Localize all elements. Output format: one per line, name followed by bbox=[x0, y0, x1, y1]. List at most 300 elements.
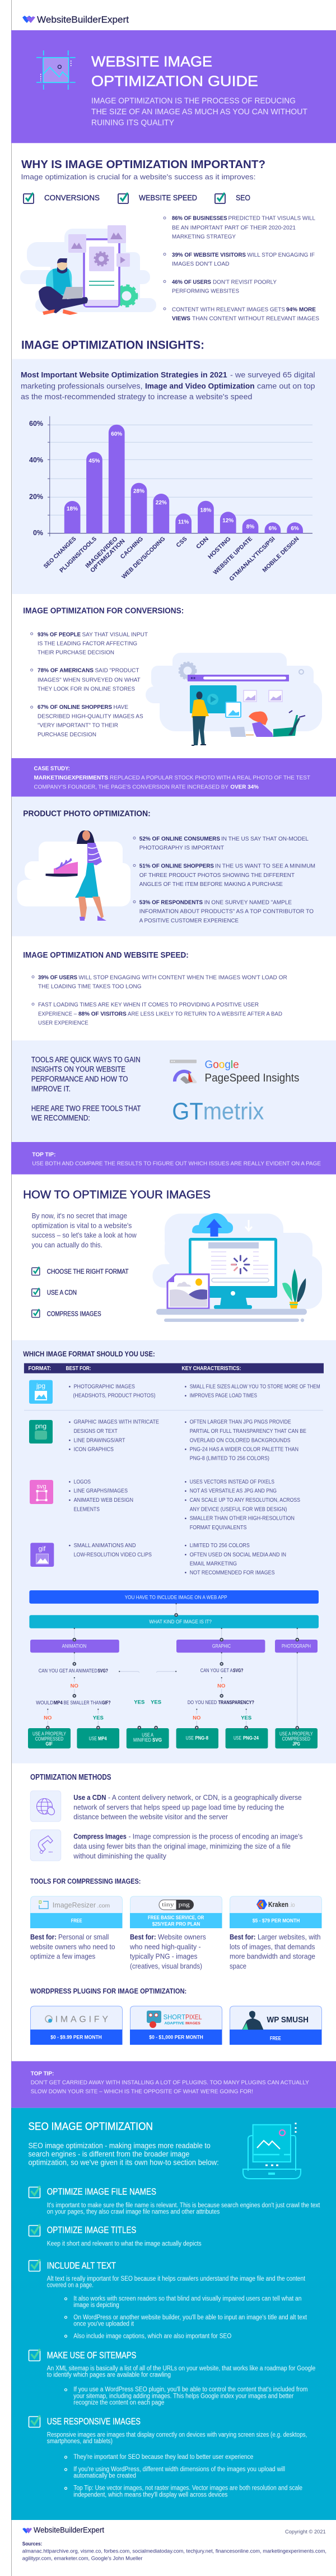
logo: .com bbox=[97, 1902, 110, 1909]
row: jpg bbox=[29, 1380, 320, 1404]
card: tinypng: who need high-quality - bbox=[129, 1942, 201, 1951]
row: png: PARTIAL OR FULL TRANSPARENCY THAT CAN BE bbox=[190, 1428, 306, 1435]
flowchart: choosing an image format: MP4 bbox=[98, 1735, 107, 1742]
bullet list: product photos: PHOTOGRAPHY IS IMPORTANT bbox=[139, 844, 225, 851]
row: svg: LOGOS bbox=[74, 1478, 91, 1485]
title bbox=[91, 53, 258, 89]
intro: optimization, so we've given it its own how-to section below: bbox=[28, 2158, 219, 2166]
logo bbox=[256, 1900, 295, 1909]
intro: search engines - is different from the broader image bbox=[28, 2150, 189, 2158]
heading: optimization methods: OPTIMIZATION METHODS bbox=[30, 1773, 111, 1782]
logo: ADAPTIVE bbox=[165, 2021, 185, 2025]
checklist: how to bbox=[32, 1267, 129, 1317]
bullet list: speed bbox=[32, 974, 287, 1027]
row: svg: USES VECTORS INSTEAD OF PIXELS bbox=[190, 1478, 274, 1485]
flowchart: choosing an image format: NO bbox=[71, 1683, 78, 1690]
row: svg: FORMAT EQUIVALENTS bbox=[190, 1524, 246, 1531]
bullet list: conversions: SAY THAT VISUAL INPUT bbox=[82, 631, 148, 638]
card: kraken: Best for: bbox=[230, 1933, 255, 1941]
subtitle: THE SIZE OF AN IMAGE AS MUCH AS YOU CAN WITHOUT bbox=[91, 107, 307, 117]
card: imageresizer: FREE bbox=[71, 1918, 82, 1924]
card: shortpixel: $0 - $1,000 PER MONTH bbox=[149, 2035, 203, 2041]
item: use responsive images: They're important for SEO because they lead to better user experience bbox=[73, 2454, 253, 2461]
bullet list: why stats: PREDICTED THAT VISUALS WILL bbox=[228, 215, 315, 222]
flowchart: choosing an image format: CAN YOU GET A bbox=[200, 1668, 233, 1674]
flowchart: choosing an image format: YES bbox=[134, 1700, 144, 1706]
flowchart: choosing an image format: DO YOU NEED bbox=[188, 1700, 217, 1706]
heading: wordpress plugins: WORDPRESS PLUGINS FOR IMAGE OPTIMIZATION: bbox=[30, 1987, 186, 1995]
item: optimize image file names: on your pages, they also crawl image file names and other attributes bbox=[47, 2209, 220, 2216]
panel: hero banner bbox=[11, 30, 336, 143]
card: kraken bbox=[230, 1896, 321, 1970]
heading: SEO IMAGE OPTIMIZATION bbox=[28, 2121, 153, 2133]
table header bbox=[24, 1363, 324, 1373]
intro text bbox=[32, 1212, 137, 1249]
flowchart: choosing an image format: NO bbox=[193, 1715, 200, 1721]
bar chart: optimization strategies: SEO CHANGES bbox=[43, 536, 78, 570]
flowchart: choosing an image format: PHOTOGRAPH bbox=[282, 1643, 311, 1649]
method: compress images: data using fewer bits than the original image, minimizing the size of a file bbox=[73, 1842, 291, 1850]
row: gif: LOW-RESOLUTION VIDEO CLIPS bbox=[74, 1551, 152, 1558]
bullet list: speed: FAST LOADING TIMES ARE KEY WHEN IT COMES TO PROVIDING A POSITIVE USER bbox=[38, 1001, 259, 1008]
row: gif: LIMITED TO 256 COLORS bbox=[190, 1542, 250, 1549]
bullet list: conversions: SAID "PRODUCT bbox=[95, 667, 139, 674]
bullet list: speed: 39% OF USERS bbox=[38, 974, 77, 981]
bar chart: optimization strategies: 6% bbox=[291, 526, 299, 532]
method: compress images: - Image compression is the process of encoding an image's bbox=[129, 1832, 303, 1841]
row: svg: ANIMATED WEB DESIGN bbox=[74, 1497, 133, 1503]
panel: case study: COMPANY'S FOUNDER, THE PAGE'S CONVERSION RATE INCREASED BY bbox=[34, 783, 228, 790]
bullet list: conversions: THEY LOOK FOR IN ONLINE STORES bbox=[38, 686, 135, 693]
item: optimize image titles: OPTIMIZE IMAGE TITLES bbox=[47, 2225, 136, 2235]
item: use responsive images: If you're using WordPress, different width dimensions of the images you upload will bbox=[73, 2466, 285, 2473]
flowchart: choosing an image format: SVG? bbox=[233, 1668, 244, 1674]
flowchart: choosing an image format: YOU HAVE TO INCLUDE IMAGE ON A WEB APP bbox=[125, 1594, 227, 1600]
flowchart: choosing an image format: USE A bbox=[142, 1732, 153, 1738]
row: png: LINE DRAWINGS/ART bbox=[74, 1437, 125, 1444]
row: png bbox=[29, 1419, 306, 1462]
bullet list: why stats: THAN CONTENT WITHOUT RELEVANT IMAGES bbox=[192, 315, 319, 322]
panel: case study: MARKETINGEXPERIMENTS bbox=[34, 774, 108, 781]
item: use responsive images: USE RESPONSIVE IMAGES bbox=[47, 2416, 141, 2427]
heading: image optimization insights: IMAGE OPTIMIZATION INSIGHTS: bbox=[21, 339, 204, 352]
panel: case study: CASE STUDY: bbox=[34, 765, 70, 772]
illustration: man with phone and media bbox=[20, 225, 156, 315]
panel: top tip 1: TOP TIP: bbox=[32, 1151, 56, 1158]
bullet list: why stats: 39% OF WEBSITE VISITORS bbox=[172, 252, 246, 258]
bullet list: product photos: IN THE US WANT TO SEE A MINIMUM bbox=[215, 863, 315, 870]
row: gif: OFTEN USED ON SOCIAL MEDIA AND IN bbox=[190, 1551, 286, 1558]
table header: BEST FOR: bbox=[66, 1365, 91, 1372]
logo: WP SMUSH bbox=[267, 2015, 309, 2025]
bar chart: optimization strategies bbox=[29, 416, 312, 583]
bar chart: optimization strategies: WEBSITE UPDATE bbox=[212, 536, 254, 576]
row: png: OVERLAID ON COLORED BACKGROUNDS bbox=[190, 1437, 291, 1444]
bullet list: why stats: MARKETING STRATEGY bbox=[172, 233, 236, 240]
flowchart: choosing an image format: PNG-24 bbox=[243, 1735, 259, 1741]
row: png: GRAPHIC IMAGES WITH INTRICATE bbox=[74, 1419, 159, 1426]
panel: seo image optimization bbox=[11, 2108, 336, 2520]
bar chart: optimization strategies: 60% bbox=[111, 431, 122, 438]
panel: top tip 2: SLOW DOWN YOUR SITE – WHICH IS THE OPPOSITE OF WHAT WE'RE GOING FOR! bbox=[31, 2088, 253, 2095]
method: compress images bbox=[30, 1830, 303, 1861]
bullet list: speed: THE LOADING TIME TAKES TOO LONG bbox=[38, 983, 142, 990]
bar chart: optimization strategies: 22% bbox=[156, 500, 167, 506]
bullet list: conversions: IS THE LEADING FACTOR AFFECTING bbox=[38, 640, 137, 647]
sources: almanac.httparchive.org, visme.co, forbes.com, socialmediatoday.com, techjury.net, financesonline.com, marketingexperiments.com, bbox=[22, 2548, 326, 2554]
bullet list: conversions: "VERY IMPORTANT" TO THEIR bbox=[38, 722, 118, 729]
panel: case study: OVER 34% bbox=[230, 783, 259, 790]
bar chart: optimization strategies: OPTIMIZATION bbox=[89, 538, 127, 574]
bar chart: optimization strategies: CSS bbox=[175, 536, 189, 549]
bullet list: conversions bbox=[31, 631, 148, 738]
item: make use of sitemaps: If you use a WordPress SEO plugin, you'll be able to control the content that's included from bbox=[73, 2387, 308, 2393]
card: tinypng: Website owners bbox=[158, 1933, 206, 1941]
card: kraken: $5 - $79 PER MONTH bbox=[253, 1918, 300, 1924]
card: tinypng: (creatives, visual brands) bbox=[130, 1962, 202, 1970]
card: kraken: space bbox=[230, 1962, 246, 1970]
item: include alt text bbox=[29, 2259, 307, 2340]
row: jpg: (HEADSHOTS, PRODUCT PHOTOS) bbox=[73, 1393, 156, 1399]
bullet list: conversions: 93% OF PEOPLE bbox=[38, 631, 81, 638]
subtitle: IMAGE OPTIMIZATION IS THE PROCESS OF REDUCING bbox=[91, 96, 296, 105]
checklist: conversions, speed, seo: SEO bbox=[236, 193, 250, 202]
method: use a cdn: Use a CDN bbox=[73, 1793, 106, 1802]
bullet list: product photos: IN ONE SURVEY NAMED "AMPLE bbox=[204, 899, 292, 906]
bar chart: optimization strategies: 28% bbox=[133, 488, 144, 494]
checklist: how to: COMPRESS IMAGES bbox=[47, 1310, 101, 1317]
logo: PIXEL bbox=[185, 2013, 202, 2021]
illustration: monitor with image file bbox=[152, 1213, 322, 1322]
item: optimize image titles: Keep it short and relevant to what the image actually depicts bbox=[47, 2240, 202, 2247]
heading: website speed: IMAGE OPTIMIZATION AND WEBSITE SPEED: bbox=[23, 951, 189, 960]
bullet list: speed: 88% OF VISITORS bbox=[78, 1010, 127, 1017]
row: svg: ELEMENTS bbox=[74, 1506, 100, 1512]
card: imageresizer: Personal or small bbox=[58, 1933, 109, 1941]
icon: laptop with image bbox=[243, 2123, 301, 2179]
flowchart: choosing an image format: YES bbox=[93, 1715, 104, 1721]
flowchart: choosing an image format: GIF bbox=[46, 1741, 53, 1747]
card: wp smush bbox=[230, 2006, 321, 2045]
intro text: success – so let's take a look at how bbox=[32, 1231, 137, 1240]
bullet list: conversions: THEIR PURCHASE DECISION bbox=[38, 649, 114, 656]
flowchart: choosing an image format: SVG bbox=[152, 1737, 162, 1743]
bar chart: optimization strategies: 45% bbox=[88, 458, 100, 464]
header logo: WebsiteBuilderExpert bbox=[37, 15, 129, 25]
card: kraken: Larger websites, with bbox=[258, 1933, 320, 1941]
method: use a cdn: distance between the website visitor and the server bbox=[73, 1813, 228, 1821]
item: optimize image file names bbox=[29, 2186, 320, 2216]
row: png: ICON GRAPHICS bbox=[74, 1446, 114, 1452]
item: make use of sitemaps: your sitemap, including adding images. This helps Google index your images and better bbox=[73, 2393, 293, 2399]
checklist: how to: CHOOSE THE RIGHT FORMAT bbox=[47, 1268, 129, 1275]
bar chart: optimization strategies: 6% bbox=[269, 526, 277, 532]
logo: .io bbox=[290, 1902, 295, 1909]
bullet list: product photos: IN THE US SAY THAT ON-MODEL bbox=[221, 836, 309, 842]
bullet list: why stats: DON'T REVISIT POORLY bbox=[213, 279, 277, 286]
flowchart: choosing an image format: USE bbox=[186, 1735, 194, 1741]
tools text: INSIGHTS ON YOUR WEBSITE bbox=[31, 1065, 125, 1074]
card: imagify bbox=[30, 2006, 122, 2045]
bullet list: product photos bbox=[133, 836, 315, 924]
bullet list: product photos: 52% OF ONLINE CONSUMERS bbox=[139, 836, 220, 842]
item: include alt text: On WordPress or another website builder, you'll be able to input an image's title and alt text bbox=[73, 2314, 307, 2321]
flowchart: choosing an image format: NO bbox=[217, 1683, 225, 1690]
row: gif bbox=[30, 1542, 286, 1576]
flowchart: choosing an image format: GIF? bbox=[102, 1700, 111, 1706]
title: WEBSITE IMAGE bbox=[91, 53, 212, 69]
bar chart: optimization strategies: CACHING bbox=[119, 536, 144, 560]
panel: top tip 2: DON'T GET CARRIED AWAY WITH INSTALLING A LOT OF PLUGINS. TOO MANY PLUGINS CAN ACTUALLY bbox=[31, 2079, 309, 2086]
method: compress images: Compress Images bbox=[73, 1832, 127, 1841]
item: use responsive images: independent, which means they'll display well across devices bbox=[73, 2491, 228, 2498]
bullet list: product photos: 51% OF ONLINE SHOPPERS bbox=[139, 863, 214, 870]
bullet list: why stats: 46% OF USERS bbox=[172, 279, 211, 286]
bullet list: product photos: A POSITIVE CUSTOMER EXPERIENCE bbox=[139, 917, 239, 924]
bullet list: why stats: WILL STOP ENGAGING IF bbox=[248, 252, 315, 258]
survey text: marketing professionals ourselves, bbox=[21, 381, 142, 390]
panel: top tip 2: TOP TIP: bbox=[31, 2070, 54, 2077]
logo: ImageResizer bbox=[53, 1901, 96, 1909]
item: use responsive images: automatically be created bbox=[73, 2473, 136, 2480]
card: imageresizer: Best for: bbox=[30, 1933, 57, 1941]
card: shortpixel bbox=[130, 2006, 222, 2045]
survey text: as the most-recommended strategy to increase a website's speed bbox=[21, 392, 252, 401]
card: kraken: lots of images, that demands bbox=[230, 1942, 315, 1951]
survey text: came out on top bbox=[257, 381, 315, 390]
item: make use of sitemaps: recognize the content on each page bbox=[73, 2399, 165, 2406]
bar chart: optimization strategies: PLUGINS/TOOLS bbox=[58, 536, 98, 574]
card: kraken: more bandwidth and storage bbox=[230, 1952, 315, 1961]
survey text: Most Important Website Optimization Strategies in 2021 bbox=[21, 370, 227, 379]
logo bbox=[242, 2011, 309, 2030]
bar chart: optimization strategies: 0% bbox=[33, 528, 43, 537]
card: tinypng: $25/YEAR PRO PLAN bbox=[152, 1921, 200, 1928]
flowchart: choosing an image format: MP4 bbox=[54, 1700, 63, 1706]
bar chart: optimization strategies: 20% bbox=[29, 493, 43, 501]
icon: cdn globe bbox=[30, 1791, 61, 1822]
logo bbox=[39, 1901, 110, 1909]
bullet list: product photos: INFORMATION ABOUT PRODUCTS" AS A TOP CONTRIBUTOR TO bbox=[139, 908, 314, 915]
bullet list: product photos: 53% OF RESPONDENTS bbox=[139, 899, 203, 906]
method: use a cdn: - A content delivery network, or CDN, is a geographically diverse bbox=[108, 1793, 302, 1802]
panel: top tip 1: USE BOTH AND COMPARE THE RESULTS TO FIGURE OUT WHICH ISSUES ARE REALLY EVIDENT ON A PAGE bbox=[32, 1161, 321, 1167]
intro bbox=[28, 2141, 219, 2166]
item: optimize image titles bbox=[29, 2225, 202, 2247]
flowchart: choosing an image format: NO bbox=[44, 1715, 52, 1721]
card: imageresizer: optimize a few images bbox=[30, 1952, 96, 1961]
icon: gif: gif bbox=[39, 1544, 46, 1552]
flowchart: choosing an image format: USE A PROPERLY bbox=[279, 1731, 313, 1737]
logo: google pagespeed insights: Google bbox=[205, 1059, 239, 1071]
panel: image formats and flowchart bbox=[12, 1340, 336, 1763]
row: png: PNG-8 (LIMITED TO 256 COLORS) bbox=[190, 1455, 269, 1462]
survey text: - we surveyed 65 digital bbox=[230, 370, 315, 379]
logo: google pagespeed insights bbox=[170, 1059, 299, 1084]
item: optimize image file names: OPTIMIZE IMAGE FILE NAMES bbox=[47, 2187, 156, 2197]
icon: png bbox=[29, 1420, 53, 1444]
item: include alt text: Also include image captions, which are also important for SEO bbox=[73, 2333, 231, 2340]
bullet list: why stats: CONTENT WITH RELEVANT IMAGES GETS bbox=[172, 306, 285, 313]
bullet list: why stats: VIEWS bbox=[172, 315, 190, 322]
card: imageresizer: website owners who need to bbox=[30, 1942, 115, 1951]
panel: case study: REPLACED A POPULAR STOCK PHOTO WITH A REAL PHOTO OF THE TEST bbox=[110, 774, 311, 781]
row: svg bbox=[30, 1478, 300, 1531]
bullet list: speed: WILL STOP ENGAGING WITH CONTENT WHEN THE IMAGES WON'T LOAD OR bbox=[78, 974, 287, 981]
bar chart: optimization strategies: 18% bbox=[67, 506, 78, 512]
flowchart: choosing an image format: COMPRESSED bbox=[282, 1736, 310, 1742]
bullet list: product photos: OF THREE PRODUCT PHOTOS SHOWING THE DIFFERENT bbox=[139, 872, 295, 879]
intro: SEO image optimization - making images more readable to bbox=[28, 2141, 211, 2150]
bar chart: optimization strategies: 40% bbox=[29, 456, 43, 464]
intro text: optimization is vital to a website's bbox=[32, 1221, 132, 1229]
flowchart: choosing an image format: TRANSPARENCY? bbox=[218, 1700, 254, 1706]
bullet list: conversions: HAVE bbox=[113, 704, 128, 711]
tools text: IMPROVE IT. bbox=[31, 1084, 71, 1093]
item: include alt text: once you've uploaded it bbox=[73, 2321, 134, 2328]
bar chart: optimization strategies: GTM/ANALYTICS/PSI bbox=[228, 535, 277, 583]
logo: IMAGES bbox=[185, 2021, 200, 2025]
panel: top tip 2 bbox=[11, 2061, 336, 2108]
panel: top tip 1 bbox=[11, 1142, 336, 1175]
intro text: you can actually do this. bbox=[32, 1241, 102, 1249]
item: use responsive images: smartphones, and tablets) bbox=[47, 2438, 113, 2445]
bullet list: why stats: BE AN IMPORTANT PART OF THEIR 2020-2021 bbox=[172, 224, 296, 231]
bullet list: conversions: 78% OF AMERICANS bbox=[38, 667, 94, 674]
bullet list: conversions: DESCRIBED HIGH-QUALITY IMAGES AS bbox=[38, 713, 143, 720]
illustration: people and browser window bbox=[146, 653, 322, 745]
bar chart: optimization strategies: 12% bbox=[222, 518, 234, 524]
flowchart: choosing an image format: ANIMATION bbox=[62, 1643, 86, 1649]
row: png: DESIGNS OR TEXT bbox=[74, 1428, 118, 1435]
logo: gtmetrix: GTmetrix bbox=[172, 1098, 264, 1125]
flowchart: choosing an image format: PNG-8 bbox=[195, 1735, 208, 1741]
item: include alt text: It also works with screen readers so that blind and visually impaired users can tell what an bbox=[73, 2295, 301, 2302]
item: include alt text: covered on a page. bbox=[47, 2282, 94, 2289]
logo: png bbox=[179, 1901, 190, 1908]
card: imagify: $0 - $9.99 PER MONTH bbox=[50, 2035, 102, 2041]
flowchart: choosing an image format: WOULD bbox=[36, 1700, 53, 1706]
bullet list: speed: USER EXPERIENCE bbox=[38, 1020, 88, 1027]
item: make use of sitemaps: to identify which pages are available for crawling bbox=[47, 2372, 171, 2379]
heading: why is image optimization important: WHY IS IMAGE OPTIMIZATION IMPORTANT? bbox=[21, 158, 265, 171]
card: tinypng: FREE BASIC SERVICE, OR bbox=[148, 1915, 204, 1921]
flowchart: choosing an image format: JPG bbox=[292, 1741, 300, 1747]
row: svg: LINE GRAPHS/IMAGES bbox=[74, 1488, 128, 1494]
copyright: Copyright © 2021 bbox=[285, 2529, 326, 2535]
bar chart: optimization strategies: IMAGE/VIDEO bbox=[84, 536, 119, 569]
bullet list: why stats: IMAGES DON'T LOAD bbox=[172, 261, 230, 267]
flowchart: choosing an image format: GRAPHIC bbox=[212, 1643, 231, 1649]
logo bbox=[159, 1900, 194, 1910]
icon: compress bbox=[30, 1830, 61, 1861]
bar chart: optimization strategies: CDN bbox=[195, 536, 210, 550]
logo: Kraken bbox=[268, 1901, 288, 1909]
bullet list: product photos: ANGLES OF THE ITEM BEFORE MAKING A PURCHASE bbox=[139, 881, 283, 888]
row: svg: ANY DEVICE (USEFUL FOR WEB DESIGN) bbox=[190, 1506, 287, 1512]
subtitle bbox=[91, 96, 307, 128]
intro text: Image optimization is crucial for a website's success as it improves: bbox=[21, 173, 255, 181]
icon: svg: svg bbox=[36, 1483, 46, 1490]
row: svg: NOT AS VERSATILE AS JPG AND PNG bbox=[190, 1488, 277, 1494]
sources: agilitypr.com, emarketer.com, Google's John Mueller bbox=[22, 2555, 142, 2561]
card: tinypng: Best for: bbox=[130, 1933, 156, 1941]
item: make use of sitemaps bbox=[29, 2349, 315, 2406]
bar chart: optimization strategies: 18% bbox=[200, 508, 212, 514]
bullet list: why stats: 86% OF BUSINESSES bbox=[172, 215, 227, 222]
bar chart: optimization strategies: WEB DEVS/CODING bbox=[120, 536, 167, 581]
item: use responsive images: Top Tip: Use vector images, not raster images. Vector images are both resolution and scale bbox=[73, 2485, 302, 2492]
panel: insights survey chart bbox=[12, 359, 336, 594]
heading: how to optimize your images: HOW TO OPTIMIZE YOUR IMAGES bbox=[23, 1189, 211, 1201]
bullet list: speed: EXPERIENCE – bbox=[38, 1010, 77, 1017]
tools text bbox=[31, 1055, 141, 1122]
icon: png: png bbox=[35, 1422, 46, 1430]
item: use responsive images bbox=[29, 2415, 307, 2498]
method: use a cdn bbox=[30, 1791, 302, 1822]
method: compress images: without diminishing the quality bbox=[73, 1851, 166, 1860]
bullet list: speed: ARE LESS LIKELY TO RETURN TO A WEBSITE AFTER A BAD bbox=[128, 1010, 282, 1017]
bullet list: conversions: IMAGES" WHEN SURVEYED ON WHAT bbox=[38, 677, 141, 684]
logo: tiny bbox=[162, 1901, 174, 1908]
flowchart: choosing an image format: CAN YOU GET AN ANIMATED bbox=[39, 1668, 97, 1674]
icon: svg bbox=[30, 1480, 53, 1504]
sources bbox=[22, 2541, 326, 2561]
card: tinypng: typically PNG - images bbox=[130, 1952, 198, 1961]
tools text: TOOLS ARE QUICK WAYS TO GAIN bbox=[31, 1055, 141, 1064]
bullet list: why stats: 94% MORE bbox=[286, 306, 316, 313]
card: imageresizer bbox=[30, 1896, 123, 1961]
row: gif: SMALL ANIMATIONS AND bbox=[74, 1542, 136, 1549]
flowchart: choosing an image format: WHAT KIND OF IMAGE IS IT? bbox=[149, 1619, 212, 1625]
row: png: OFTEN LARGER THAN JPG PNGS PROVIDE bbox=[190, 1419, 291, 1426]
panel: product photo optimization bbox=[12, 797, 336, 936]
subtitle: RUINING ITS QUALITY bbox=[91, 118, 174, 128]
icon: gif bbox=[30, 1543, 54, 1567]
table header: FORMAT: bbox=[28, 1365, 51, 1372]
bar chart: optimization strategies: MOBILE DESIGN bbox=[261, 536, 301, 574]
flowchart: choosing an image format: USE bbox=[234, 1735, 241, 1741]
survey text: Image and Video Optimization bbox=[145, 381, 255, 390]
card: wp smush: FREE bbox=[270, 2035, 281, 2041]
row: jpg: IMPROVES PAGE LOAD TIMES bbox=[190, 1393, 257, 1399]
bar chart: optimization strategies: 8% bbox=[246, 524, 254, 530]
panel: case study bbox=[11, 758, 336, 797]
logo: SHORT bbox=[164, 2013, 186, 2021]
card: tinypng bbox=[129, 1896, 222, 1970]
heading: PRODUCT PHOTO OPTIMIZATION: bbox=[23, 810, 151, 819]
row: gif: EMAIL MARKETING bbox=[190, 1560, 237, 1567]
icon: jpg bbox=[29, 1380, 53, 1404]
flowchart: choosing an image format bbox=[28, 1590, 319, 1748]
flowchart: choosing an image format: SVG? bbox=[97, 1668, 108, 1674]
heading: tools for compressing images: TOOLS FOR COMPRESSING IMAGES: bbox=[30, 1877, 141, 1886]
bar chart: optimization strategies: 11% bbox=[178, 519, 189, 525]
flowchart: choosing an image format: USE A PROPERLY bbox=[32, 1731, 66, 1737]
row: svg: CAN SCALE UP TO ANY RESOLUTION, ACROSS bbox=[190, 1497, 300, 1503]
item: include alt text: Alt text is really important for SEO because it helps crawlers understand the image file and the content bbox=[47, 2276, 306, 2282]
bar chart: optimization strategies: 60% bbox=[29, 419, 43, 428]
item: include alt text: INCLUDE ALT TEXT bbox=[47, 2261, 116, 2271]
flowchart: choosing an image format: YES bbox=[151, 1700, 161, 1706]
bar chart: optimization strategies: HOSTING bbox=[207, 536, 232, 560]
checklist: conversions, speed, seo: WEBSITE SPEED bbox=[139, 193, 197, 202]
flowchart: choosing an image format: YES bbox=[241, 1715, 251, 1721]
bullet list: why stats: PERFORMING WEBSITES bbox=[172, 288, 239, 295]
logo bbox=[147, 2011, 202, 2028]
checklist: conversions, speed, seo: CONVERSIONS bbox=[44, 193, 100, 202]
logo: google pagespeed insights: PageSpeed Insights bbox=[205, 1072, 299, 1084]
